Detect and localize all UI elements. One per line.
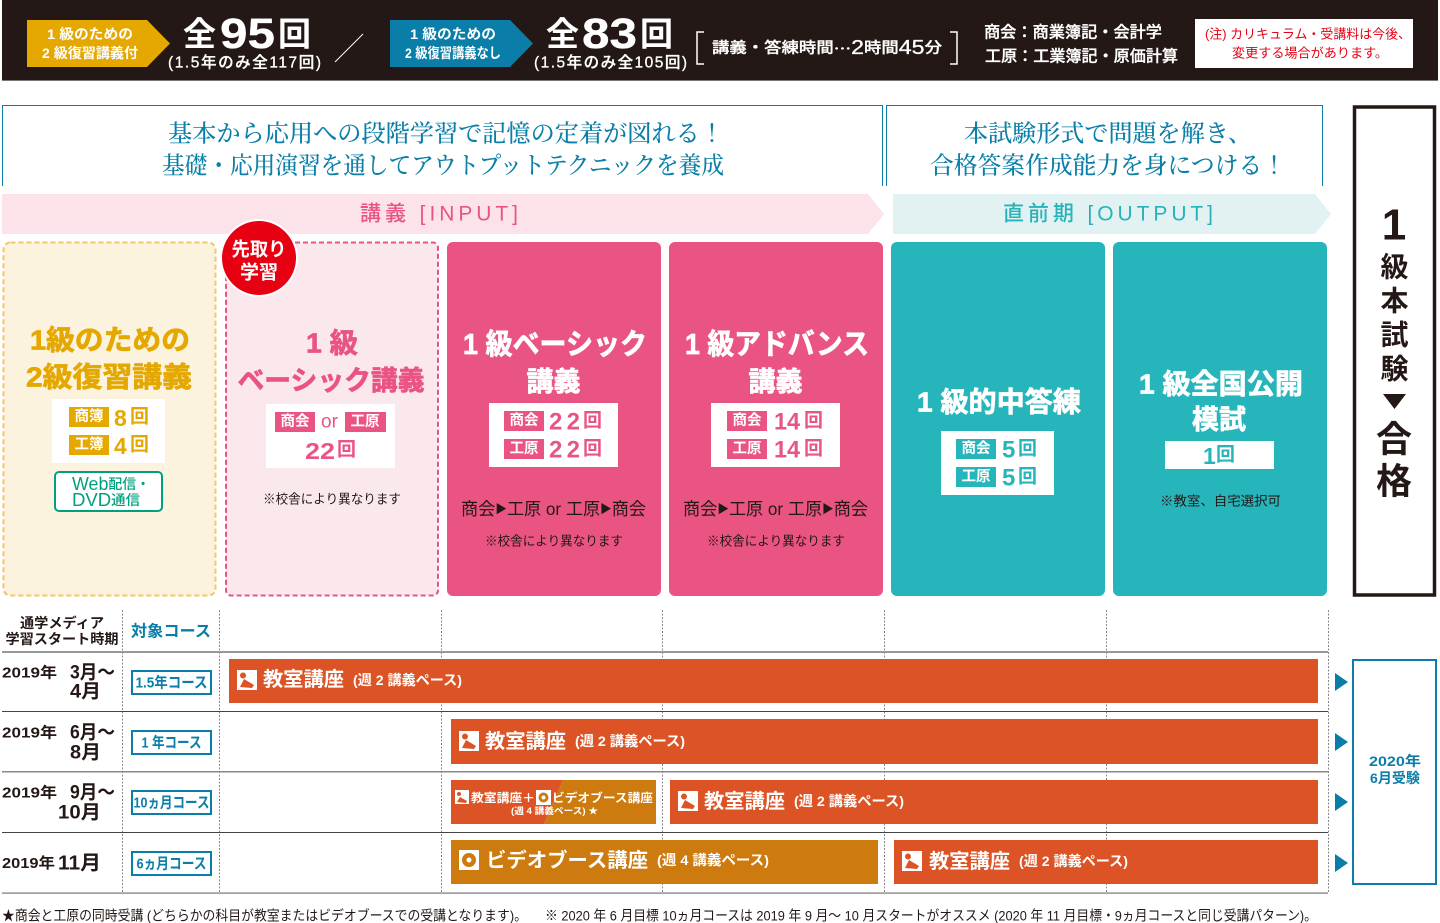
label: without review course (390, 20, 533, 67)
card: preview basic: 回 (337, 440, 356, 460)
subject abbreviations: 商会：商業簿記・会計学 (984, 24, 1162, 42)
badge: advance study (220, 219, 298, 297)
card: basic: 回 (583, 410, 602, 432)
card: preview basic: or (321, 412, 339, 432)
card: grade 2 review: 1級のための (30, 324, 190, 356)
row 4 labels: 2019年 (2, 854, 55, 872)
card: preview basic: 工原 (350, 414, 380, 430)
card: grade 2 review: 工簿 (74, 435, 104, 453)
session count 83: 回 (640, 16, 673, 52)
heading: input phase (2, 106, 882, 186)
bar: video booth: ビデオブース講座 (486, 848, 648, 872)
card: practice (891, 242, 1105, 596)
box: 2020 exam: 2020年 (1369, 753, 1421, 769)
session count 83: (1.5年のみ全105回) (534, 54, 687, 72)
card: advanced: 工原 (732, 441, 762, 457)
bar: classroom 1 year: (週 2 講義ペース) (575, 733, 685, 749)
class duration: 講義・答練時間 …2時間45分 (712, 37, 942, 59)
slash (335, 34, 363, 62)
bar: classroom 10 month: (週 2 講義ペース) (794, 793, 904, 809)
label: with review course: 1 級のための (47, 26, 133, 42)
session count 95: 回 (278, 16, 311, 52)
class duration (697, 32, 957, 64)
row 4 labels: 11月 (58, 852, 101, 874)
card: practice: 回 (1018, 438, 1037, 460)
heading: output phase: 合格答案作成能力を身につける！ (930, 146, 1286, 180)
card: mock exam: 回 (1216, 444, 1235, 466)
band: input: 講義 [INPUT] (360, 202, 518, 226)
card: advanced: 1 級アドバンス (685, 328, 869, 361)
badge: advance study: 学習 (240, 260, 278, 284)
row 1 labels: 4月 (70, 682, 101, 702)
arrows to exam (1335, 673, 1348, 872)
bar: video booth: (週 4 講義ペース) (657, 852, 769, 868)
card: preview basic: 22 (305, 438, 335, 464)
bar: classroom 6 month: (週 2 講義ペース) (1019, 853, 1128, 869)
card: preview basic: ベーシック講義 (238, 366, 424, 396)
card: basic: 22 (549, 436, 580, 464)
row 1 labels: 1.5年コース (136, 674, 208, 692)
row 3 labels: 10ヵ月コース (134, 794, 210, 812)
card: grade 2 review: 2級復習講義 (26, 362, 192, 392)
row 2 labels: 6月～ (70, 722, 115, 744)
session count 95: 95 (220, 10, 275, 58)
table heading: start period: 学習スタート時期 (6, 631, 118, 647)
card: basic: 回 (583, 438, 602, 460)
heading: input phase: 基礎・応用演習を通してアウトプットテクニックを養成 (162, 146, 724, 180)
card: advanced: 商会 (732, 412, 762, 429)
row 2 labels: 8月 (70, 742, 101, 764)
row 1 labels: 3月～ (70, 662, 115, 684)
footnotes (2, 908, 1317, 923)
card: grade 2 review: 8 (114, 405, 127, 431)
card: basic: 商会 (510, 412, 539, 429)
table heading: start period (6, 615, 118, 647)
bar: classroom 1 year: 教室講座 (485, 730, 566, 753)
session count 83: 全 (546, 16, 579, 52)
note box (1195, 19, 1413, 68)
card: basic: 商会▶工原 or 工原▶商会 (461, 499, 646, 519)
session count 83: 83 (582, 10, 637, 58)
card: basic: ※校舎により異なります (485, 534, 623, 548)
row 3 labels: 2019年 (2, 784, 57, 802)
heading: output phase (886, 106, 1322, 186)
card: grade 2 review: Web配信・ (72, 474, 150, 494)
card: preview basic: 商会 (280, 413, 310, 430)
row 4 labels (2, 852, 211, 875)
icon: classroom (678, 791, 698, 811)
card: practice: 工原 (962, 469, 991, 485)
card: advanced: 商会▶工原 or 工原▶商会 (683, 499, 868, 519)
icon: classroom (902, 851, 922, 871)
bar: classroom 1.5 year: (週 2 講義ペース) (353, 672, 462, 688)
row 1 labels: 2019年 (2, 664, 57, 682)
bar: classroom 10 month: 教室講座 (704, 790, 785, 813)
card: grade 2 review: 4 (114, 433, 127, 459)
table heading: start period: 通学メディア (20, 615, 104, 631)
card: grade 2 review: 回 (130, 434, 149, 456)
icon: classroom (455, 790, 469, 804)
card: practice: 回 (1018, 466, 1037, 488)
icon: video booth (536, 790, 551, 805)
bar: classroom 1 year (451, 719, 1318, 764)
card: basic: 講義 (526, 367, 580, 397)
label: with review course: 2 級復習講義付 (42, 45, 138, 61)
card: practice: 商会 (962, 440, 991, 457)
box: grade 1 exam pass: 格 (1376, 460, 1412, 502)
card: advanced: 講義 (748, 367, 802, 397)
card: grade 2 review (4, 242, 216, 596)
label: without review course: 2 級復習講義なし (405, 45, 501, 61)
card: basic: 22 (549, 408, 580, 436)
card: basic: 1 級ベーシック (463, 328, 647, 361)
box: 2020 exam (1353, 660, 1436, 884)
session count 95 (168, 10, 321, 72)
card: preview basic: 1 級 (306, 328, 358, 358)
card: advanced: 14 (774, 436, 801, 464)
bar: classroom 1.5 year: 教室講座 (263, 668, 344, 691)
bar: classroom 6 month (894, 840, 1318, 884)
icon: video booth (459, 850, 479, 870)
bar: classroom plus video booth: (週 4 講義ペース) ★ (511, 805, 598, 816)
bar: classroom plus video booth: ビデオブース講座 (552, 790, 653, 805)
heading: output phase: 本試験形式で問題を解き、 (964, 114, 1252, 148)
card: practice: 5 (1002, 464, 1015, 492)
card: advanced (669, 242, 883, 596)
card: advanced: 回 (804, 438, 823, 460)
card: grade 2 review: DVD通信 (72, 490, 140, 510)
icon: classroom (459, 731, 479, 751)
card: mock exam: ※教室、自宅選択可 (1160, 494, 1281, 508)
box: grade 1 exam pass: 級 (1380, 252, 1409, 282)
row 2 labels: 2019年 (2, 724, 57, 742)
box: 2020 exam: 6月受験 (1370, 770, 1420, 786)
box: grade 1 exam pass (1354, 107, 1434, 595)
card: preview basic (226, 242, 438, 596)
card: advanced: 回 (804, 410, 823, 432)
session count 95: 全 (183, 16, 216, 52)
card: mock exam: 模試 (1192, 405, 1246, 435)
bar: classroom 1.5 year (229, 659, 1318, 703)
row 2 labels (2, 722, 211, 764)
table heading: course: 対象コース (131, 622, 211, 640)
card: basic: 工原 (510, 441, 539, 457)
bar: classroom plus video booth: 教室講座＋ (471, 790, 535, 805)
session count 83 (534, 10, 687, 72)
session count 95: (1.5年のみ全117回) (168, 54, 321, 72)
box: grade 1 exam pass: 試 (1380, 320, 1409, 350)
card: basic (447, 242, 661, 596)
box: grade 1 exam pass: 験 (1380, 354, 1409, 384)
label: with review course (27, 20, 170, 67)
card: practice: 1 級的中答練 (917, 386, 1081, 418)
header bar (2, 0, 1438, 81)
card: grade 2 review: 回 (130, 406, 149, 428)
card: practice: 5 (1002, 436, 1015, 464)
note box: 変更する場合があります。 (1232, 46, 1388, 60)
card: advanced: 14 (774, 408, 801, 436)
bar: classroom 6 month: 教室講座 (929, 850, 1010, 873)
card: mock exam: 1 (1203, 443, 1216, 469)
box: grade 1 exam pass: 本 (1380, 286, 1409, 316)
subject abbreviations: 工原：工業簿記・原価計算 (985, 46, 1178, 66)
band: output (893, 194, 1331, 234)
bar: classroom plus video booth (451, 780, 656, 824)
card: grade 2 review: 商簿 (74, 407, 104, 425)
row 3 labels: 10月 (58, 802, 101, 824)
icon: classroom (237, 670, 257, 690)
badge: advance study: 先取り (232, 238, 286, 260)
band: output: 直前期 [OUTPUT] (1003, 202, 1213, 226)
card: mock exam: 1 級全国公開 (1139, 368, 1303, 400)
card: preview basic: ※校舎により異なります (263, 492, 401, 506)
subject abbreviations (984, 24, 1178, 66)
row 2 labels: 1 年コース (142, 734, 202, 752)
heading: input phase: 基本から応用への段階学習で記憶の定着が図れる！ (168, 114, 724, 148)
row 3 labels: 9月～ (70, 782, 115, 804)
band: input (2, 194, 884, 234)
box: grade 1 exam pass: 合 (1376, 418, 1412, 460)
note box: (注) カリキュラム・受講料は今後、 (1205, 26, 1411, 42)
row 4 labels: 6ヵ月コース (136, 856, 206, 872)
bar: video booth (451, 840, 878, 884)
card: advanced: ※校舎により異なります (707, 534, 845, 548)
row 3 labels (2, 782, 211, 824)
box: grade 1 exam pass: 1 (1382, 200, 1406, 250)
label: without review course: 1 級のための (410, 26, 496, 42)
row 1 labels (2, 662, 211, 702)
bar: classroom 10 month (670, 780, 1318, 824)
schedule grid (2, 610, 1328, 894)
card: mock exam (1113, 242, 1327, 596)
